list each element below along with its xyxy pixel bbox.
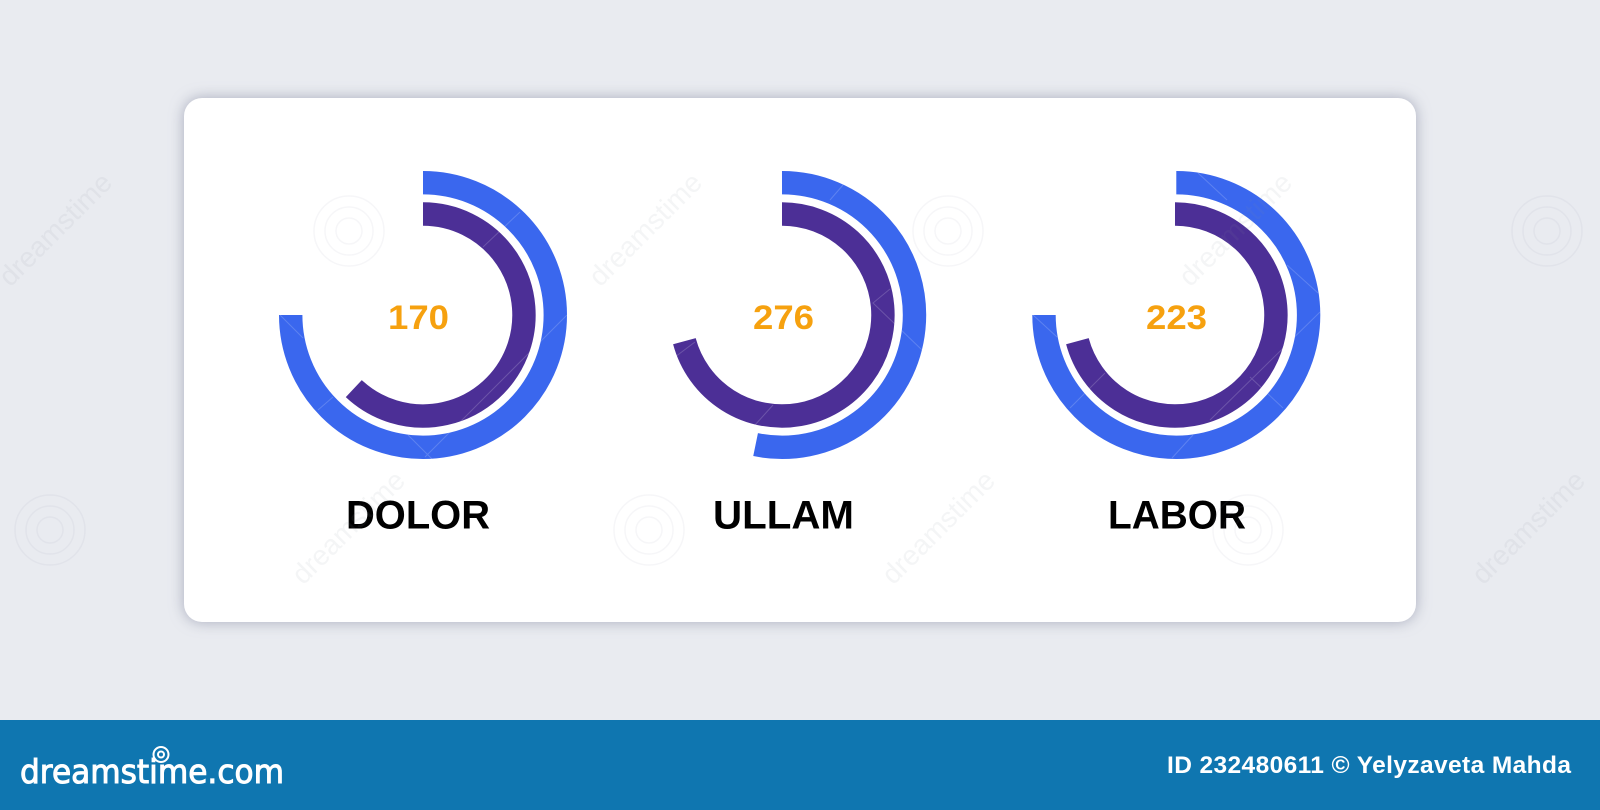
chart: DOLOR radial — [291, 183, 555, 447]
arc: LABOR purple — [1077, 214, 1276, 416]
footer logo text: dreamstime.com — [20, 752, 284, 791]
watermark: diagonal text: dreamstime — [876, 465, 1001, 590]
heading: LABOR: LABOR — [1108, 494, 1246, 538]
icon: logo spiral — [154, 747, 168, 762]
arc: LABOR blue — [1044, 183, 1309, 447]
value: 223: 223 — [1146, 299, 1207, 337]
watermark: spirals — [15, 196, 1582, 565]
value: 276: 276 — [753, 299, 814, 337]
panel: white card — [184, 98, 1416, 622]
footer credit: ID 232480611 © Yelyzaveta Mahda — [1167, 752, 1571, 779]
watermark: diagonal text: dreamstime — [286, 465, 411, 590]
arc: ULLAM purple — [684, 214, 883, 416]
watermark: diagonal text — [0, 167, 1591, 590]
footer band — [0, 720, 1600, 810]
watermark: diagonal text: dreamstime — [1466, 465, 1591, 590]
chart: LABOR radial — [1044, 183, 1309, 447]
chart: ULLAM radial — [684, 183, 914, 447]
watermark: lattice lines — [280, 173, 1320, 459]
heading: ULLAM: ULLAM — [713, 494, 854, 538]
arc: DOLOR purple — [354, 214, 524, 416]
watermark: diagonal text: dreamstime — [583, 167, 708, 292]
arc: ULLAM blue — [756, 183, 914, 447]
value: 170: 170 — [388, 299, 449, 337]
heading: DOLOR: DOLOR — [346, 494, 490, 538]
arc: DOLOR blue — [291, 183, 555, 447]
watermark: diagonal text: dreamstime — [1173, 167, 1298, 292]
